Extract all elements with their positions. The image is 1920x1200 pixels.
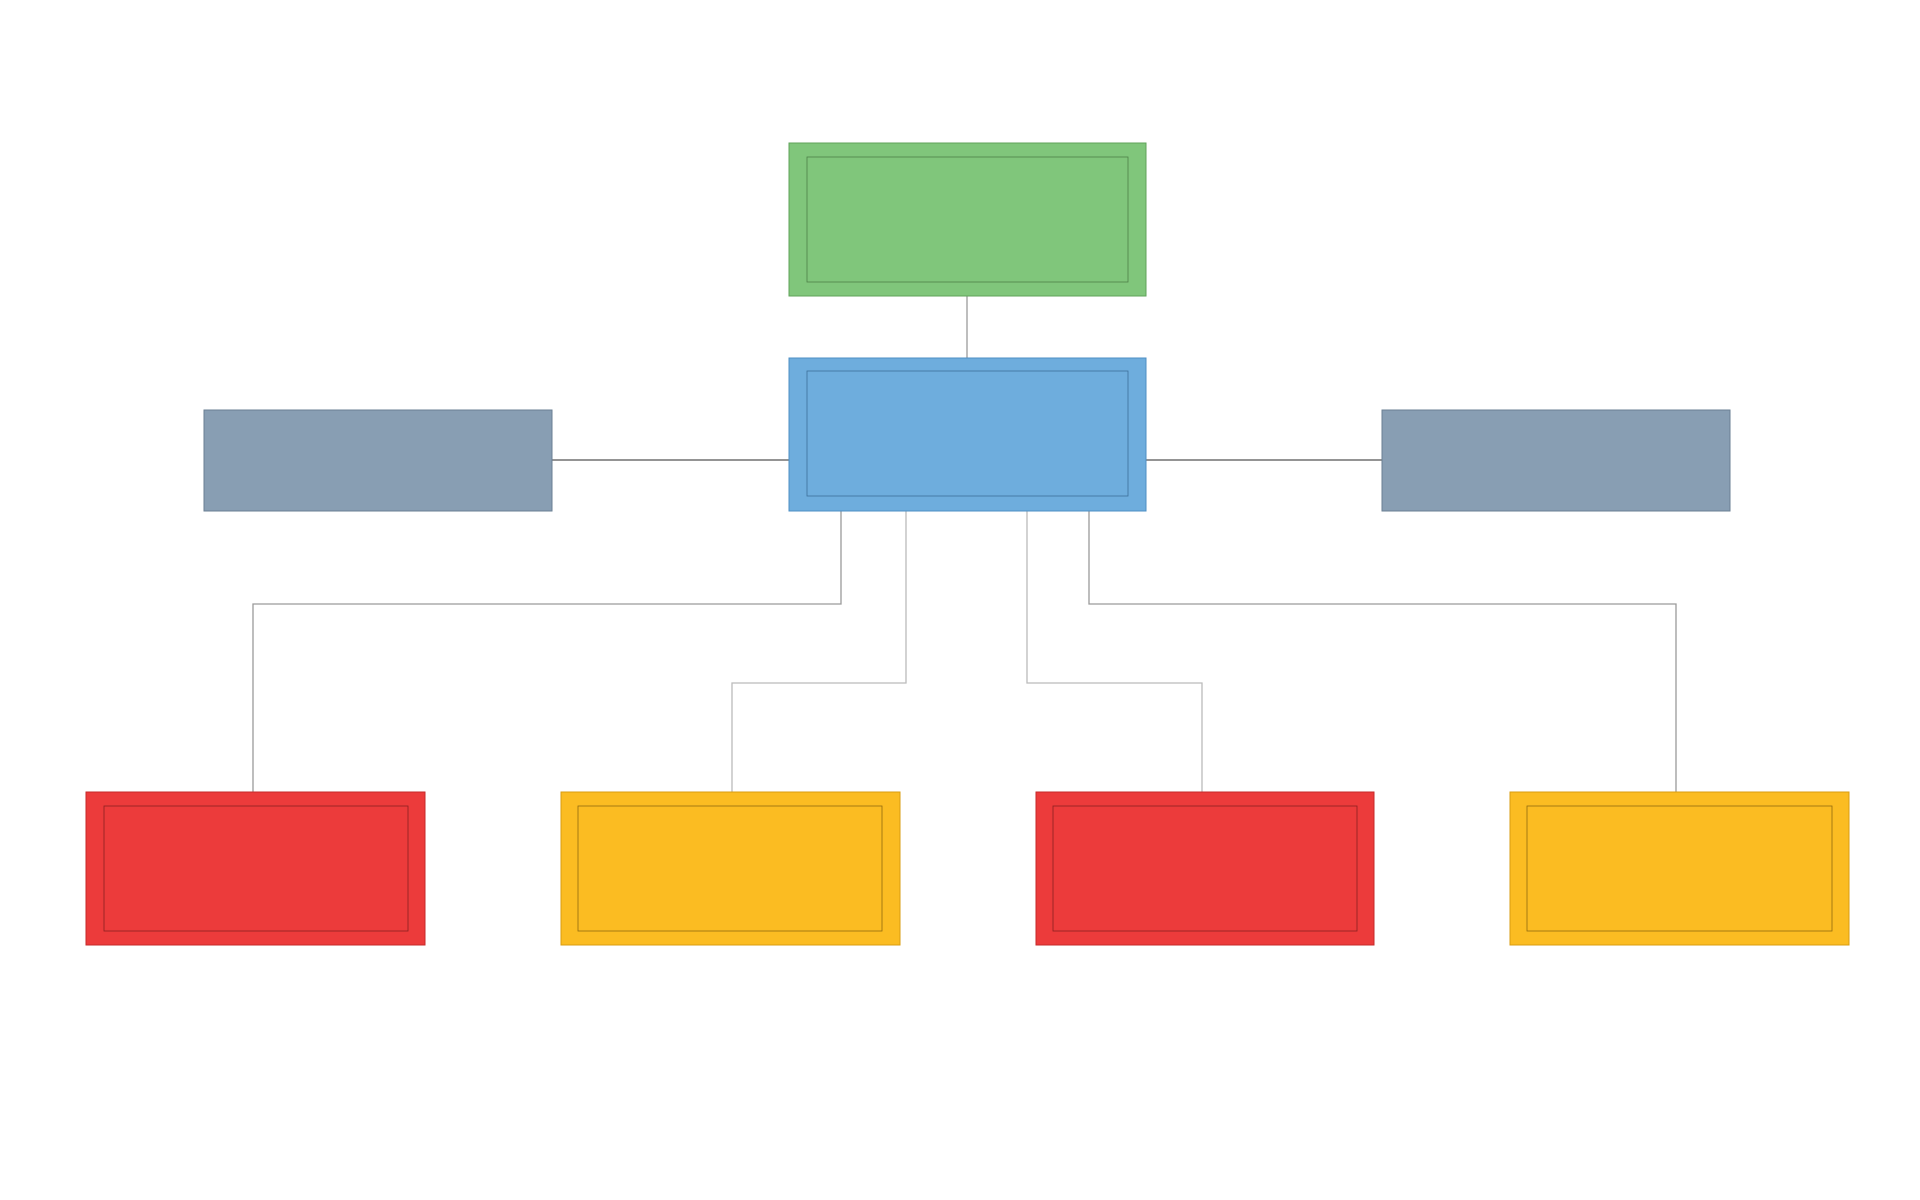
box: red 2	[1036, 792, 1374, 945]
box: left grey	[204, 410, 552, 511]
box: red 1	[86, 792, 425, 945]
box: top green	[789, 143, 1146, 296]
box: central blue	[789, 358, 1146, 511]
box: right grey	[1382, 410, 1730, 511]
box: yellow 1	[561, 792, 900, 945]
box: yellow 2	[1510, 792, 1849, 945]
